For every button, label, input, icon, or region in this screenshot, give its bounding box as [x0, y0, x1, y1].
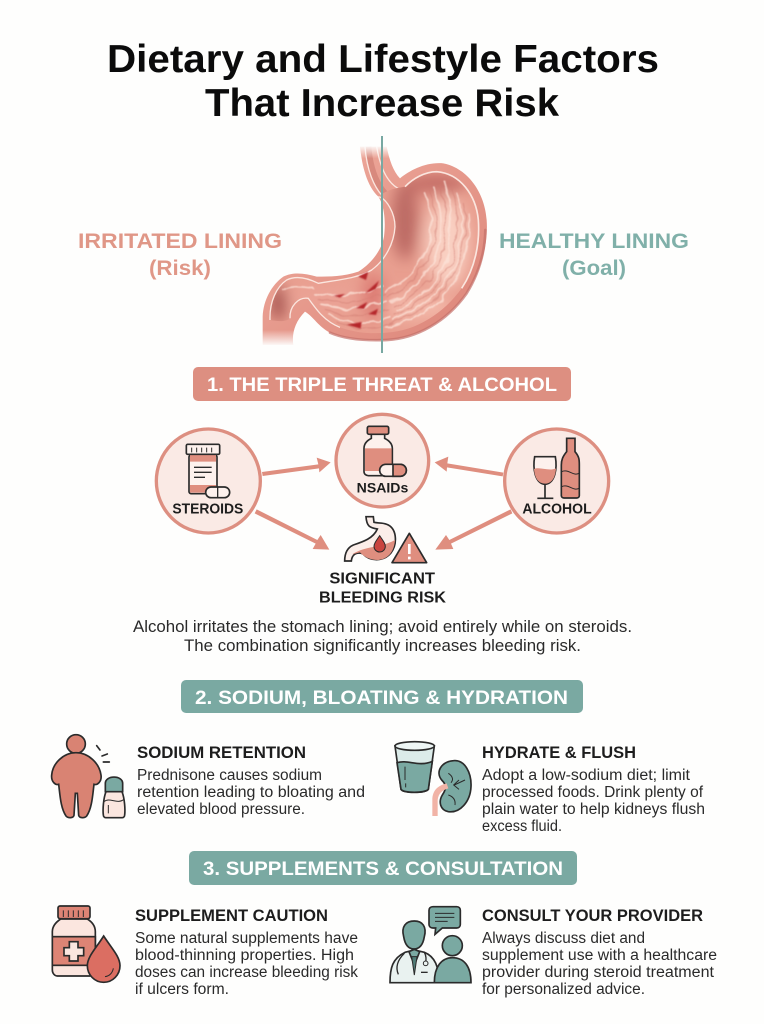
text block: supplement caution: doses can increase bleeding risk — [135, 964, 358, 981]
icon: doctor and patient consultation — [390, 907, 471, 983]
arrow: steroids to NSAIDs — [262, 458, 331, 476]
text block: supplement caution: SUPPLEMENT CAUTION — [135, 907, 328, 925]
text block: consult your provider — [482, 907, 717, 998]
label: irritated lining: IRRITATED LINING — [78, 230, 282, 253]
icon: bleeding stomach and warning — [345, 517, 427, 563]
text block: alcohol warning: Alcohol irritates the stomach lining; avoid entirely while on steroids. — [133, 618, 632, 636]
arrow: alcohol to NSAIDs — [435, 457, 503, 476]
icon: water glass and kidney — [395, 742, 471, 816]
text block: consult your provider: CONSULT YOUR PROVIDER — [482, 907, 703, 925]
section heading 2 — [181, 680, 583, 713]
text block: sodium retention: retention leading to bloating and — [137, 784, 365, 801]
text block: supplement caution — [135, 907, 358, 998]
title: That Increase Risk — [205, 82, 560, 125]
text block: hydrate and flush: HYDRATE & FLUSH — [482, 744, 636, 762]
label: significant bleeding risk: BLEEDING RISK — [319, 589, 446, 606]
circle: steroids — [156, 429, 260, 533]
text block: hydrate and flush: Adopt a low-sodium diet; limit — [482, 767, 691, 784]
text block: consult your provider: supplement use with a healthcare — [482, 947, 717, 964]
section heading 1 — [193, 367, 571, 401]
text block: hydrate and flush: processed foods. Drink plenty of — [482, 784, 704, 801]
circle: NSAIDs: NSAIDs — [357, 480, 409, 496]
arrow: steroids to bleeding risk — [255, 509, 329, 550]
text block: alcohol warning: The combination significantly increases bleeding risk. — [184, 637, 581, 655]
text block: consult your provider: for personalized advice. — [482, 981, 645, 998]
text block: supplement caution: blood-thinning properties. High — [135, 947, 354, 964]
text block: sodium retention: SODIUM RETENTION — [137, 744, 306, 762]
title — [107, 38, 659, 125]
text block: sodium retention: Prednisone causes sodium — [137, 767, 322, 784]
text block: hydrate and flush: excess fluid. — [482, 818, 562, 835]
section heading 3 — [189, 851, 577, 885]
panel: triple threat diagram — [156, 414, 609, 606]
section heading 1: 1. THE TRIPLE THREAT & ALCOHOL — [207, 374, 557, 396]
circle: alcohol — [505, 429, 609, 533]
section heading 3: 3. SUPPLEMENTS & CONSULTATION — [203, 858, 563, 880]
section heading 2: 2. SODIUM, BLOATING & HYDRATION — [195, 687, 568, 709]
label: healthy lining — [499, 230, 689, 280]
label: irritated lining — [78, 230, 282, 280]
title: Dietary and Lifestyle Factors — [107, 38, 659, 81]
icon: bloated figure and salt shaker — [52, 735, 125, 818]
divider line between lining states — [381, 136, 383, 353]
label: healthy lining: (Goal) — [562, 257, 626, 280]
label: significant bleeding risk — [319, 570, 446, 606]
text block: hydrate and flush: plain water to help kidneys flush — [482, 801, 705, 818]
circle: alcohol: ALCOHOL — [522, 501, 592, 517]
label: healthy lining: HEALTHY LINING — [499, 230, 689, 253]
label: irritated lining: (Risk) — [149, 257, 211, 280]
arrow: alcohol to bleeding risk — [435, 509, 512, 550]
text block: sodium retention — [137, 744, 365, 818]
text block: alcohol warning — [133, 618, 632, 655]
text block: supplement caution: Some natural supplements have — [135, 930, 358, 947]
text block: hydrate and flush — [482, 744, 705, 835]
text block: supplement caution: if ulcers form. — [135, 981, 229, 998]
label: significant bleeding risk: SIGNIFICANT — [329, 570, 435, 587]
icon: supplement bottle and blood drop — [52, 906, 120, 982]
stomach illustration — [258, 145, 490, 346]
text block: sodium retention: elevated blood pressure. — [137, 801, 305, 818]
circle: steroids: STEROIDS — [172, 501, 244, 517]
text block: consult your provider: Always discuss diet and — [482, 930, 645, 947]
text block: consult your provider: provider during steroid treatment — [482, 964, 715, 981]
stomach cavity with folds — [270, 172, 478, 333]
circle: NSAIDs — [336, 414, 429, 507]
